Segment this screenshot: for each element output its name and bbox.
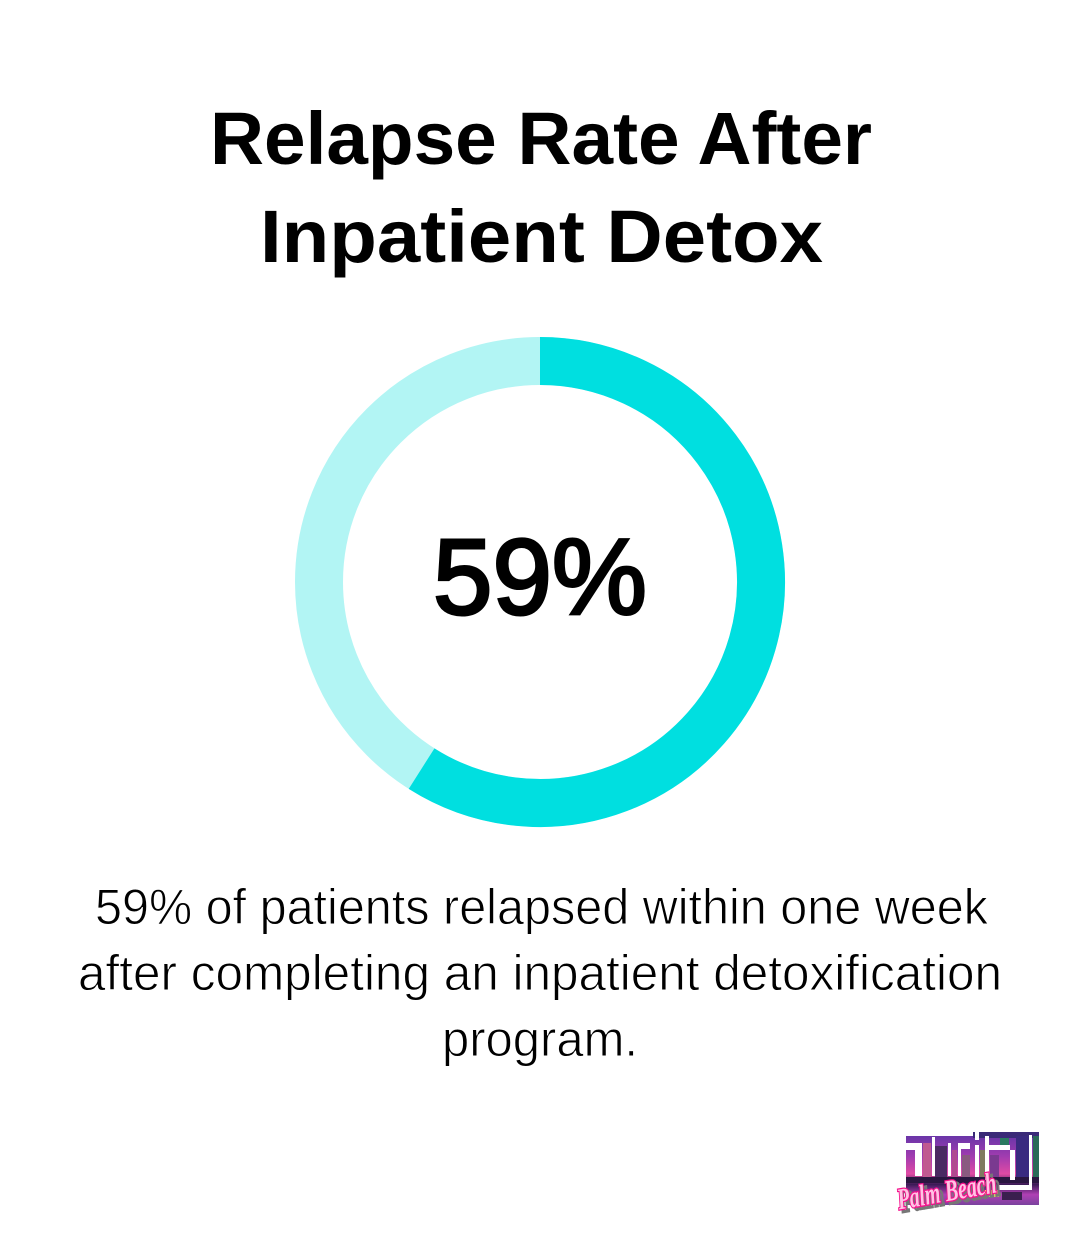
logo white letterforms xyxy=(906,1132,1032,1190)
title: Relapse Rate After xyxy=(210,97,872,180)
description text: 59% of patients relapsed within one week xyxy=(95,879,989,935)
logo: Amity Palm Beach xyxy=(894,1132,1039,1220)
donut value arc xyxy=(422,361,761,803)
description text: after completing an inpatient detoxification xyxy=(78,945,1002,1001)
logo script: Palm Beach: Palm Beach xyxy=(897,1169,1002,1219)
logo script: Palm Beach: Palm Beach xyxy=(894,1167,999,1217)
donut chart: 59% xyxy=(319,361,761,803)
description text xyxy=(78,879,1002,1067)
center value: 59% xyxy=(433,516,647,637)
title: Inpatient Detox xyxy=(260,195,823,278)
description text: program. xyxy=(442,1011,638,1067)
title xyxy=(210,97,872,278)
logo script: Palm Beach xyxy=(894,1166,1002,1220)
donut remainder arc xyxy=(319,361,761,803)
logo picture xyxy=(906,1132,1039,1205)
